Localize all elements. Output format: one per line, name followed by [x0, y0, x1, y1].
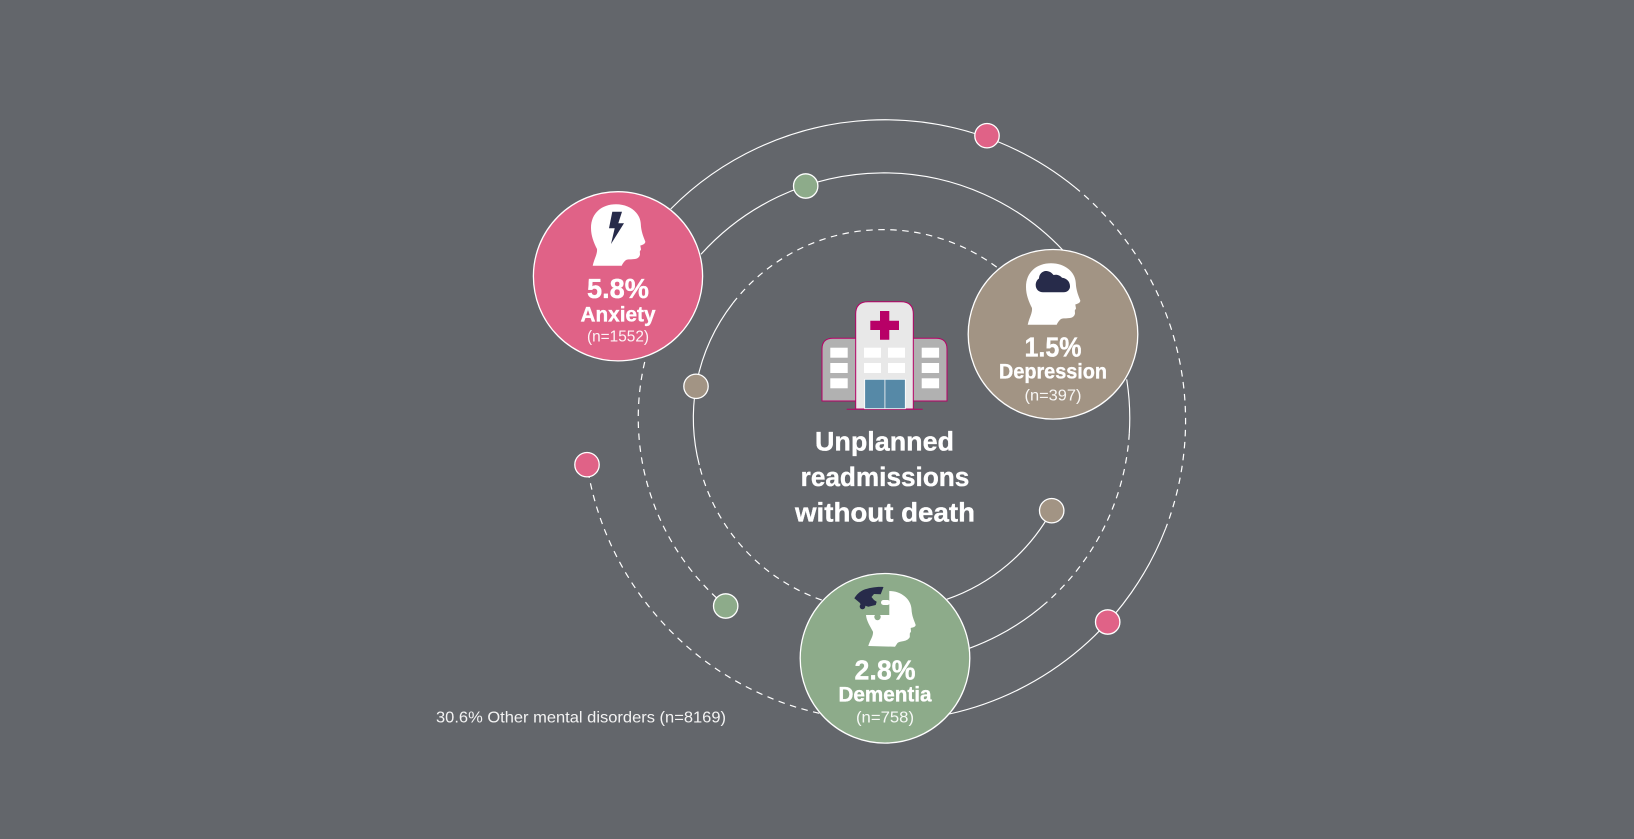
other mental disorders label: 30.6% Other mental disorders (n=8169): [436, 710, 726, 727]
panel: anxiety: [533, 192, 703, 361]
panel: depression: [968, 249, 1138, 419]
dementia label: Dementia: [838, 684, 932, 707]
anxiety label: Anxiety: [580, 304, 656, 326]
outer orbit: anxiety: [587, 120, 1186, 714]
panel: dementia: [800, 574, 970, 743]
depression sample size: (n=397): [1024, 388, 1082, 404]
dementia percentage: 2.8%: [854, 654, 916, 685]
anxiety percentage: 5.8%: [587, 273, 649, 304]
title: [794, 427, 975, 528]
icon: head with lightning bolt: [591, 204, 645, 266]
title: Unplanned: [815, 427, 954, 457]
depression label: Depression: [999, 360, 1107, 383]
title: readmissions: [801, 462, 969, 492]
dementia sample size: (n=758): [856, 709, 914, 726]
orbit marker dots: [575, 124, 1120, 634]
depression percentage: 1.5%: [1024, 332, 1082, 363]
title: without death: [794, 498, 975, 528]
icon: head with puzzle piece: [854, 587, 916, 647]
middle orbit: dementia: [638, 173, 1130, 648]
icon: head with cloud: [1026, 263, 1080, 325]
anxiety sample size: (n=1552): [587, 328, 649, 346]
icon: hospital: [822, 302, 947, 409]
inner orbit: depression: [693, 230, 1052, 600]
